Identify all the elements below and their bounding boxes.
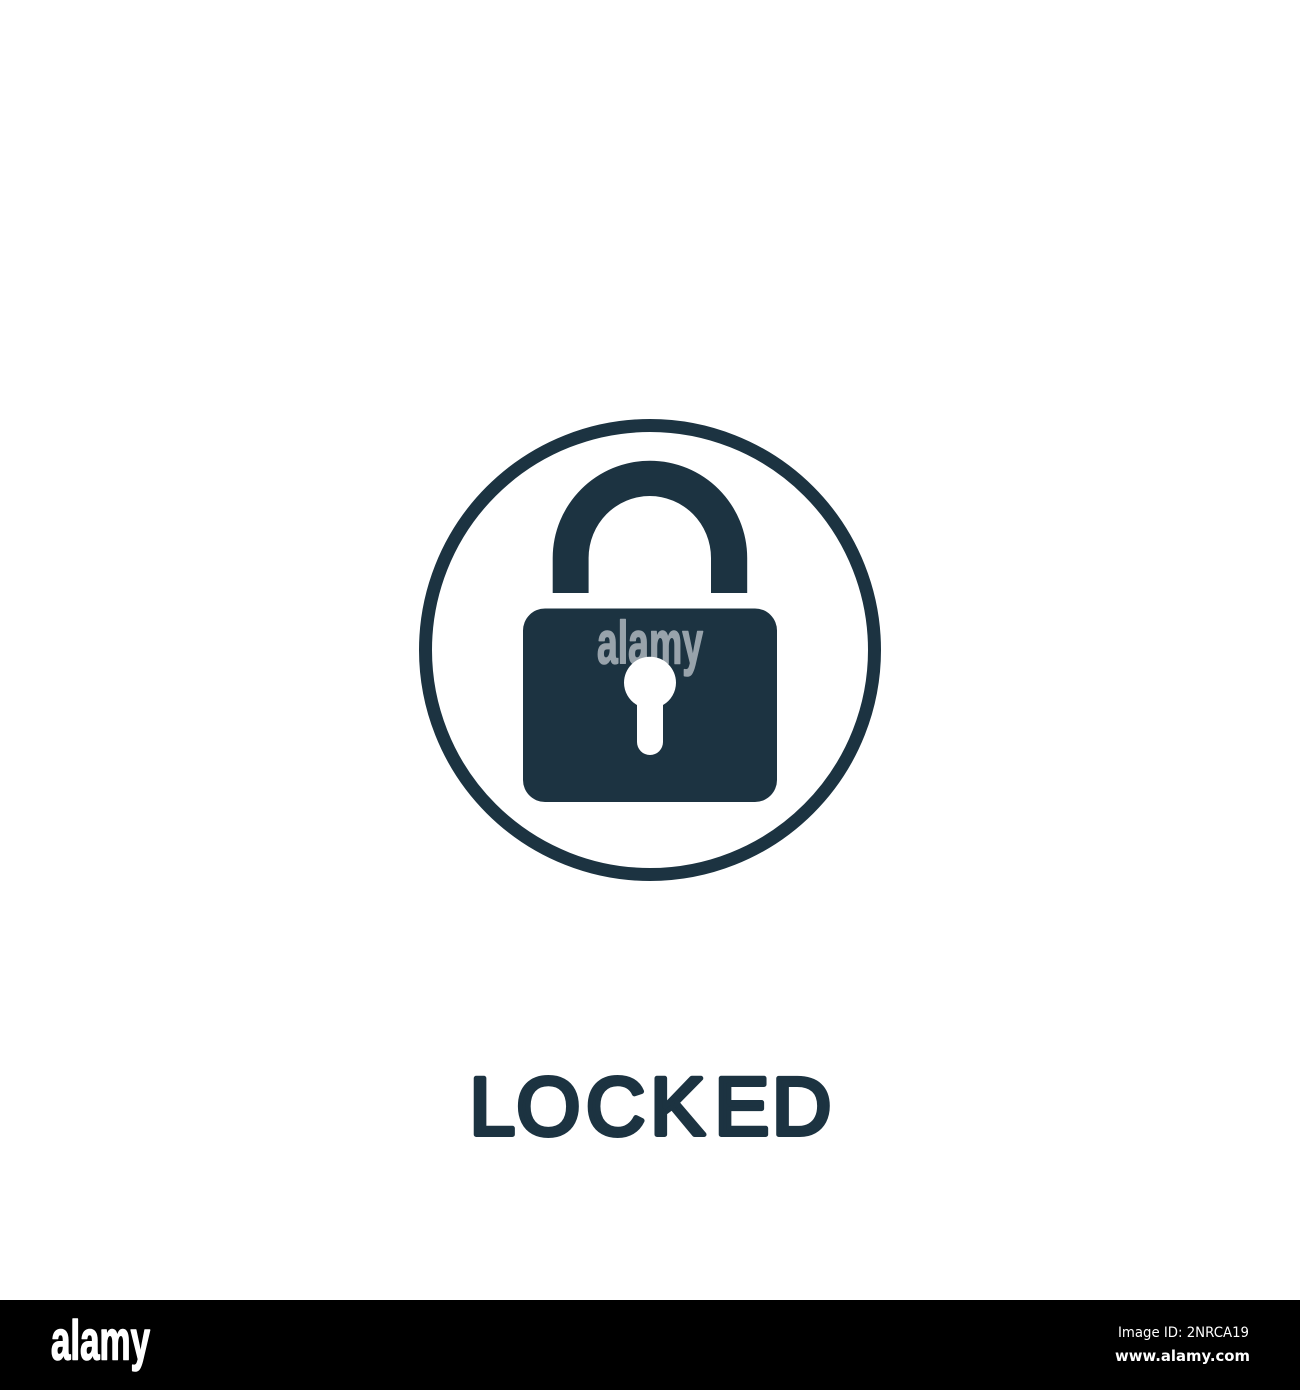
padlock shackle [553,461,747,593]
image id: Image ID: 2NRCA19 [1118,1325,1249,1341]
keyhole [624,657,676,755]
footer bar [0,1300,1300,1390]
website url: www.alamy.com [1115,1347,1250,1365]
icon: locked padlock in circle [426,426,874,874]
title: LOCKED: LOCKED [470,1062,831,1152]
padlock body [523,608,777,802]
icon ring [426,426,874,874]
watermark: alamy center: alamy [597,610,703,676]
footer logo: alamy: alamy [51,1308,150,1372]
